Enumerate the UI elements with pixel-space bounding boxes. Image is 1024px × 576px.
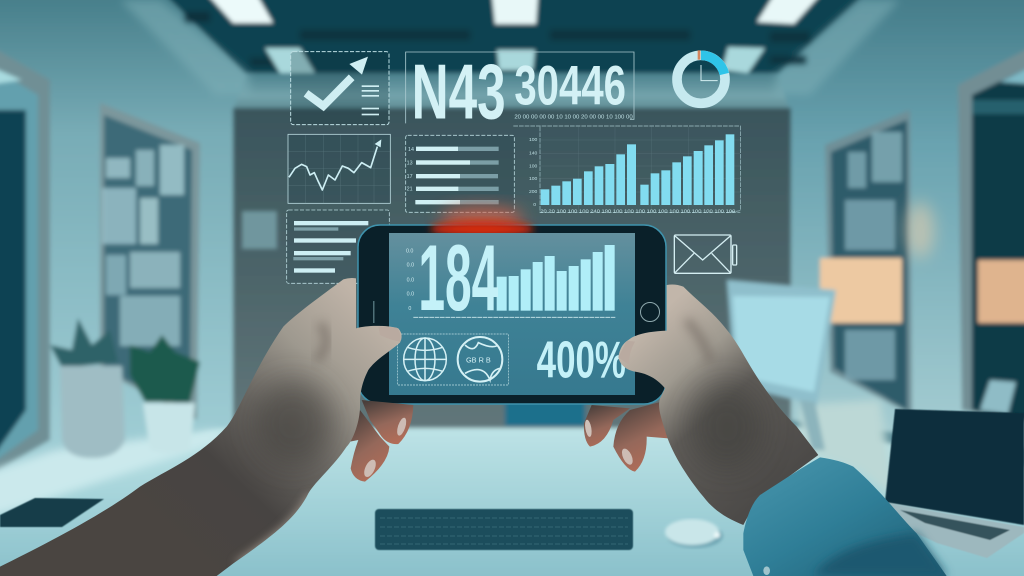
blurred chair back: [980, 380, 1016, 414]
knuckle crease: [317, 323, 326, 360]
ceiling lights: [208, 0, 820, 73]
keyboard: [375, 509, 633, 550]
panel: big number readout: 20 00 00 00 00 10 10 00 20 00 00 10 100 00: [514, 115, 633, 121]
ceiling: [150, 0, 880, 75]
phone axis labels: 0.0: [407, 263, 414, 269]
bar chart: 0: [533, 202, 536, 208]
phone axis labels: [406, 248, 414, 312]
globes panel: [398, 334, 508, 385]
panel: progress bars: 14: [408, 147, 414, 153]
knuckle crease: [687, 320, 710, 362]
panel: line chart: [288, 134, 390, 203]
bar chart: [513, 126, 740, 214]
panel: progress bars: 17: [407, 174, 413, 180]
left bookcase: [100, 103, 200, 420]
home button: [640, 302, 660, 322]
desk monitor: [727, 280, 836, 450]
phone bar chart: [497, 245, 615, 311]
panel: text list: [287, 210, 389, 283]
bar chart: 100: [529, 137, 538, 143]
mouse: [665, 519, 723, 548]
panel: progress bars: 13: [407, 161, 413, 167]
lower fingers: [350, 400, 413, 482]
phone percent: 400%: [537, 331, 626, 389]
icon: donut clock: [677, 50, 725, 103]
smartphone: [358, 221, 666, 404]
phone screen: [389, 226, 635, 395]
panel: big number readout: 30446: [514, 54, 626, 117]
right hand: [584, 270, 947, 576]
holographic dashboard: [287, 48, 740, 283]
forearm rim light: [232, 490, 310, 563]
soffit band: [190, 73, 830, 111]
wall picture: [242, 211, 277, 249]
phone axis labels: 0.0: [406, 248, 413, 254]
right door: [958, 40, 1024, 425]
band under phone: [505, 400, 585, 426]
globes panel: GB R B: [466, 356, 491, 365]
wall light glow: [906, 202, 934, 258]
panel: progress bars: 21: [407, 187, 413, 193]
bar chart: 100: [529, 163, 538, 169]
speaker slot: [373, 301, 374, 323]
left door: [0, 40, 50, 480]
bar chart: 140: [529, 151, 538, 157]
palm shadow: [253, 380, 333, 467]
laptop: [885, 409, 1024, 558]
panel: progress bars: [406, 135, 514, 212]
panel: big number readout: [406, 48, 634, 136]
red glow on bezel: [430, 221, 534, 237]
bar chart: 200: [529, 189, 538, 195]
red glow above phone: [440, 206, 524, 230]
palm shadow: [690, 383, 763, 470]
bar chart: 100: [529, 176, 538, 182]
right wall: [777, 0, 1024, 450]
table: [0, 428, 1024, 576]
desk lamps: [820, 258, 1024, 323]
tablet on desk: [0, 498, 104, 527]
right bookcase: [825, 110, 912, 415]
icon: envelope: [674, 235, 737, 273]
phone axis labels: 0.0: [407, 292, 414, 298]
thumb nail: [384, 327, 400, 342]
plants: [50, 318, 200, 458]
left wall: [0, 0, 247, 490]
left hand: [0, 270, 413, 576]
palm and forearm: [0, 270, 407, 576]
lower fingers: [584, 402, 668, 472]
shirt sleeve: [743, 457, 947, 576]
back wall: [233, 108, 791, 433]
panel: trend check icon: [291, 52, 389, 125]
ceiling grid shadows: [185, 12, 210, 22]
phone axis labels: 0: [408, 306, 411, 312]
thumb nail: [618, 340, 634, 358]
palm: [618, 284, 818, 525]
bar chart: 20 20 100 100 100 240 190 100 100 100 100 100 100 100 100 100 100 100: [540, 208, 736, 214]
phone big number: 184: [418, 226, 498, 330]
phone axis labels: 0.0: [407, 277, 414, 283]
ceiling edge highlights: [120, 0, 250, 95]
panel: big number readout: N43: [412, 48, 506, 136]
